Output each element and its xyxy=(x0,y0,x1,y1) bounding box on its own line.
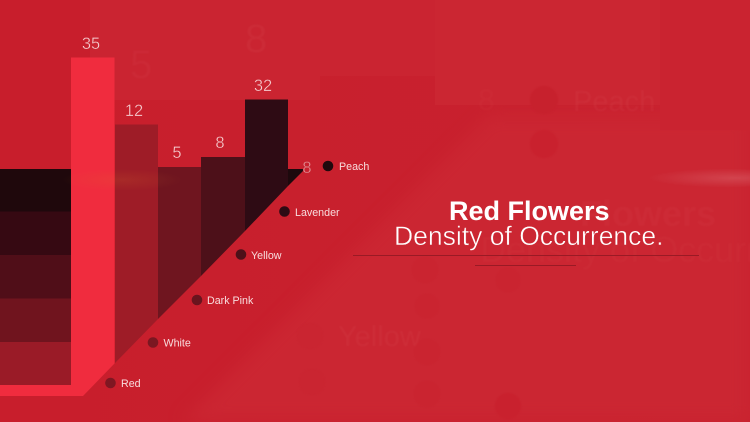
legend: White xyxy=(148,337,191,350)
subheading: Density of Occurrence: Density of Occurrence. xyxy=(394,221,664,251)
bar: White value 5 xyxy=(158,167,201,319)
ghost background layer: 8 xyxy=(478,84,495,117)
bar: Yellow value 32 xyxy=(245,100,288,231)
left lens flare xyxy=(62,169,182,191)
value labels xyxy=(82,35,312,177)
title divider short xyxy=(475,265,576,266)
ghost background layer: Peach xyxy=(573,86,655,118)
value labels: 8 xyxy=(215,134,225,152)
legend: Peach: Peach xyxy=(339,161,369,173)
legend: Lavender xyxy=(279,206,340,219)
right lens flare xyxy=(610,168,750,188)
legend xyxy=(105,161,369,390)
left stacked bands xyxy=(0,169,71,385)
bar: bright value 35 with base xyxy=(0,58,114,396)
legend: Red xyxy=(105,378,141,390)
legend: White: White xyxy=(164,338,191,350)
ghost background layer: Flowers xyxy=(580,193,716,234)
value labels: 35 xyxy=(82,35,100,53)
bar: Red value 12 xyxy=(115,124,158,363)
legend: Yellow: Yellow xyxy=(251,250,282,262)
legend: Dark Pink: Dark Pink xyxy=(207,295,254,307)
legend: Lavender: Lavender xyxy=(295,207,340,219)
value labels: 5 xyxy=(172,144,182,162)
bar: Lavender tail xyxy=(288,169,305,186)
legend: Peach xyxy=(323,161,369,173)
ghost background layer: 5 xyxy=(130,43,152,87)
legend: Yellow xyxy=(236,249,282,262)
value labels: 32 xyxy=(254,77,272,95)
legend: Red: Red xyxy=(121,378,141,390)
ghost background layer: 8 xyxy=(245,17,267,61)
bar chart xyxy=(0,58,305,396)
heading: Red Flowers: Red Flowers xyxy=(449,196,610,226)
ghost background layer: Yellow xyxy=(338,321,422,353)
title xyxy=(394,196,664,251)
value labels: 8 xyxy=(302,159,312,177)
bar: Dark Pink value 8 xyxy=(201,157,245,276)
value labels: 12 xyxy=(125,102,143,120)
title divider long xyxy=(353,255,699,256)
